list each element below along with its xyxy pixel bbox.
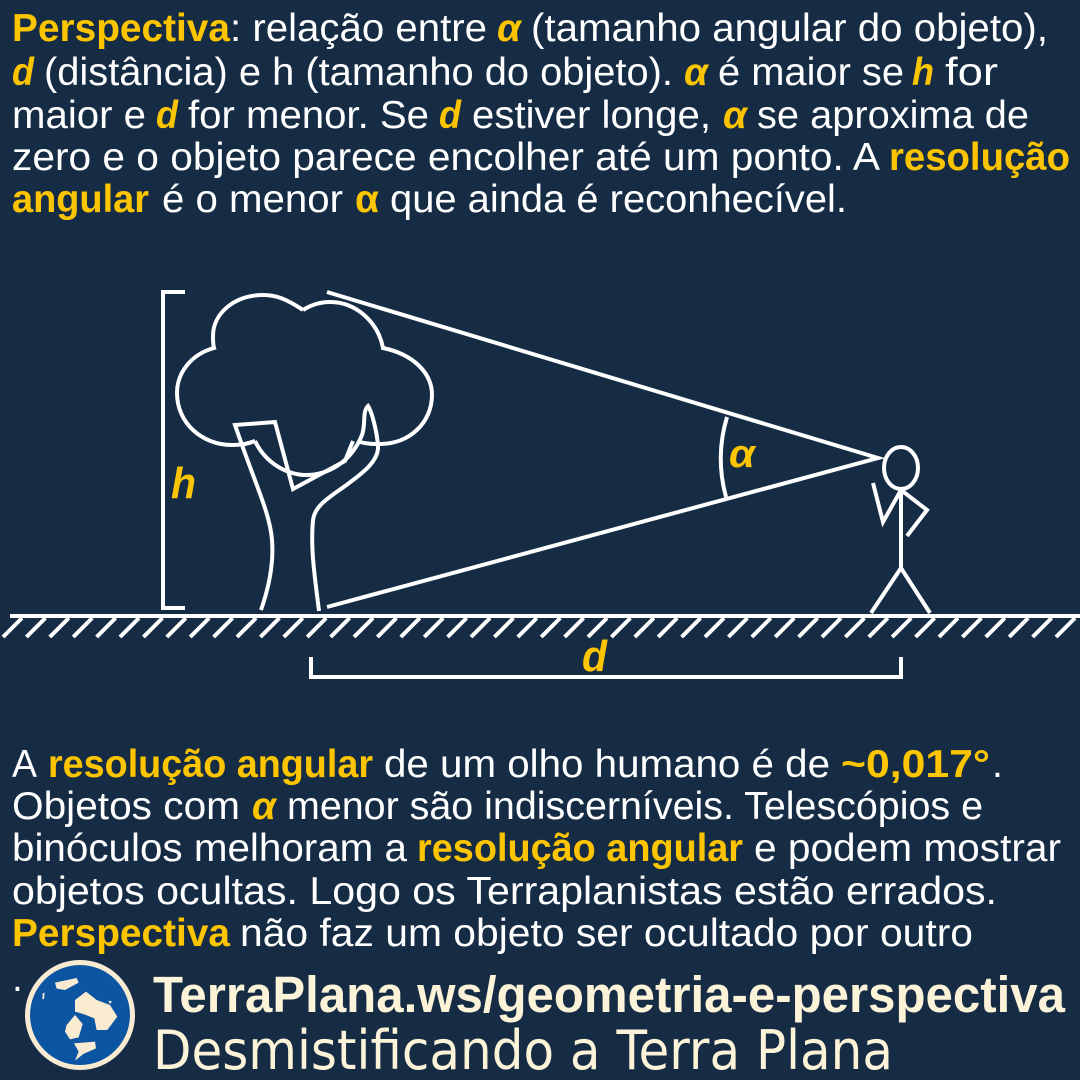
bottom explanatory text: resolução angular (417, 827, 743, 870)
bottom explanatory text: objetos ocultas. Logo os Terraplanistas estão errados. (12, 870, 997, 913)
top explanatory text: estiver longe, (472, 94, 711, 137)
bottom explanatory text: menor são indiscerníveis. Telescópios e (287, 785, 983, 828)
top explanatory text: que ainda é reconhecível. (390, 178, 847, 221)
label d: d (582, 632, 608, 681)
top explanatory text: h (912, 51, 934, 94)
top explanatory text: α (355, 178, 379, 221)
top explanatory text: zero e o objeto parece encolher até um ponto. A (12, 136, 880, 179)
angle lines to eye (327, 292, 878, 607)
top explanatory text: α (684, 51, 710, 94)
top explanatory text: α (723, 94, 749, 137)
footer url: TerraPlana.ws/geometria-e-perspectiva (153, 966, 1066, 1023)
top explanatory text: se aproxima de (757, 94, 1029, 137)
top explanatory text: (tamanho angular do objeto), (531, 7, 1048, 50)
bottom explanatory text: ~0,017° (841, 743, 990, 786)
top explanatory text: d (439, 94, 462, 137)
icon: stick person (871, 447, 930, 613)
bottom explanatory text: resolução angular (48, 743, 373, 786)
top explanatory text: : relação entre (230, 7, 487, 50)
top explanatory text: angular (12, 178, 149, 221)
top explanatory text: Perspectiva (12, 7, 230, 50)
top explanatory text: resolução (889, 136, 1070, 179)
top explanatory text: for menor. Se (188, 94, 429, 137)
top explanatory text: é o menor (162, 178, 343, 221)
bottom explanatory text: de um olho humano é de (384, 743, 830, 786)
bottom explanatory text (12, 743, 1061, 1000)
perspective diagram (3, 292, 1080, 681)
top explanatory text: α (497, 7, 523, 50)
label h: h (171, 459, 196, 508)
distance bracket (311, 657, 901, 677)
bottom explanatory text: Objetos com (12, 785, 240, 828)
bottom explanatory text: binóculos melhoram a (12, 827, 407, 870)
top explanatory text: maior e (12, 94, 146, 137)
ground line with hatching (3, 616, 1080, 637)
icon: tree (177, 295, 432, 611)
bottom explanatory text: e podem mostrar (754, 827, 1061, 870)
top explanatory text: for (945, 51, 998, 94)
bottom explanatory text: Perspectiva (12, 912, 230, 955)
angle arc (721, 417, 727, 497)
bottom explanatory text: . (12, 957, 23, 1000)
bottom explanatory text: . (992, 743, 1003, 786)
label alpha: α (729, 432, 757, 476)
height bracket (163, 292, 185, 608)
bottom explanatory text: não faz um objeto ser ocultado por outro (240, 912, 973, 955)
bottom explanatory text: α (252, 785, 278, 828)
top explanatory text: (distância) e h (tamanho do objeto). (44, 51, 673, 94)
bottom explanatory text: A (12, 743, 37, 786)
icon: flat earth globe logo (25, 960, 135, 1070)
top explanatory text: d (12, 51, 35, 94)
top explanatory text (12, 7, 1070, 221)
top explanatory text: d (156, 94, 179, 137)
top explanatory text: é maior se (718, 51, 904, 94)
